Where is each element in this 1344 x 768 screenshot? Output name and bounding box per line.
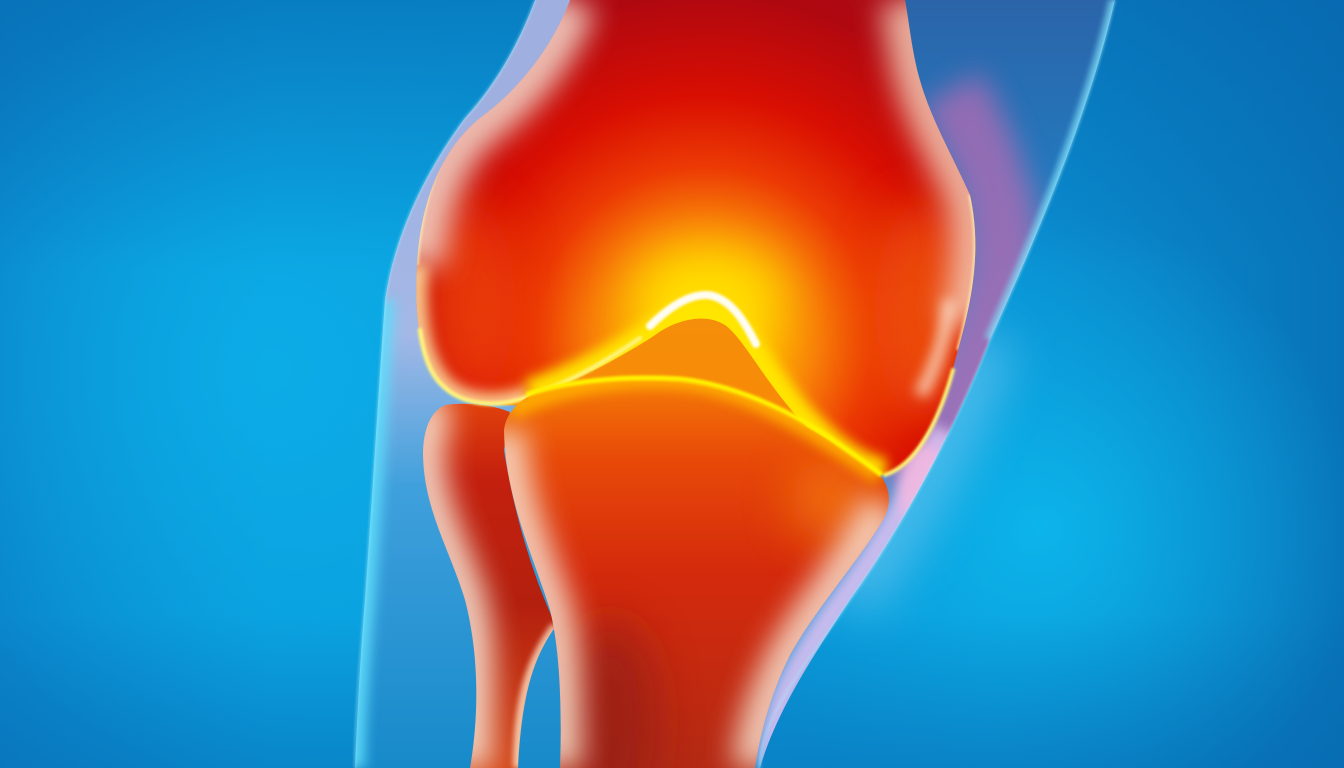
thin rim xyxy=(417,118,465,265)
pale left side xyxy=(504,430,560,768)
fibula bone xyxy=(423,404,556,768)
tibia bone xyxy=(504,378,889,768)
pale upper edge right xyxy=(905,0,976,325)
pale streak right xyxy=(920,300,950,395)
hot glow along joint xyxy=(530,318,885,475)
white crescent above meniscus xyxy=(650,295,756,344)
meniscus cartilage xyxy=(500,285,815,435)
leg soft-tissue silhouette xyxy=(350,0,1120,768)
femur bone xyxy=(416,0,976,475)
joint rim highlight xyxy=(420,330,640,404)
pale upper edge left xyxy=(417,0,570,265)
tibia top highlight xyxy=(528,378,880,474)
left lower glow edge xyxy=(416,265,530,404)
pale right side xyxy=(755,505,884,768)
warm top glow xyxy=(510,378,880,475)
